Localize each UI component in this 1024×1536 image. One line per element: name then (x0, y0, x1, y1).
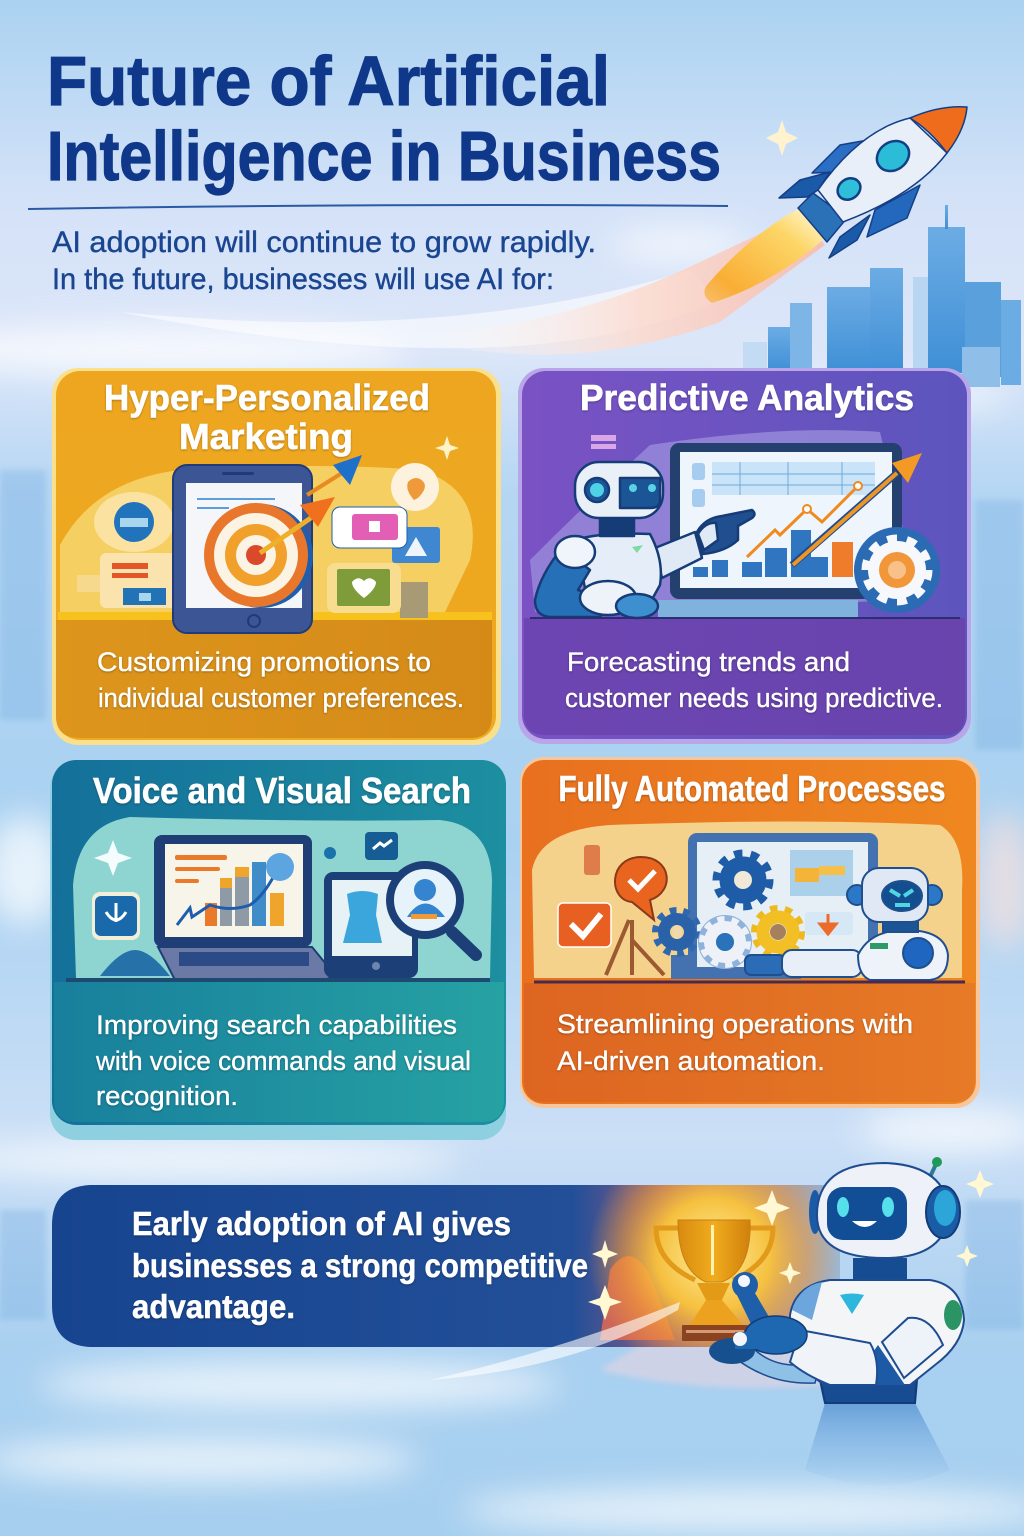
body text: Customizing promotions to (97, 647, 431, 677)
panel: hyper-personalized marketing (52, 368, 501, 745)
screen (671, 833, 878, 979)
front hand (709, 1316, 807, 1364)
banner text (132, 1205, 588, 1325)
heading (104, 377, 430, 457)
robot holding trophy (709, 1157, 964, 1485)
panel: predictive analytics (518, 368, 971, 744)
body text: customer needs using predictive. (565, 683, 943, 713)
upper arm (882, 1318, 943, 1378)
subtitle (52, 226, 596, 296)
near arm (535, 548, 610, 617)
body text: AI-driven automation. (557, 1046, 825, 1076)
callout banner (52, 1185, 840, 1390)
body text (95, 1010, 471, 1111)
torso (790, 1280, 964, 1385)
subtitle: AI adoption will continue to grow rapidly. (52, 226, 596, 259)
head (809, 1190, 821, 1234)
body text: Improving search capabilities (96, 1010, 457, 1040)
body text (97, 647, 464, 713)
title: Intelligence in Business (47, 117, 721, 195)
arrow swoosh to trophy (430, 1302, 680, 1380)
heading: Voice and Visual Search (93, 770, 471, 811)
chart screen (658, 443, 922, 617)
icon: gear (854, 527, 940, 613)
body text (565, 647, 943, 713)
title: Future of Artificial (47, 42, 610, 120)
icon: rocket (779, 107, 967, 258)
body text: recognition. (96, 1081, 238, 1111)
city skyline top right (743, 205, 1021, 387)
icon: floating cards (327, 463, 440, 618)
icon: checklist (558, 845, 667, 975)
icon: gears (656, 854, 801, 969)
small legend (591, 435, 616, 449)
body text: Forecasting trends and (567, 647, 850, 677)
heading: Marketing (179, 416, 353, 457)
hill (100, 950, 170, 976)
panel: voice and visual search (50, 760, 506, 1140)
body text: individual customer preferences. (98, 683, 464, 713)
icon: chart tile (365, 832, 398, 860)
icon: laptop chart (154, 835, 335, 980)
robot worker (745, 868, 948, 980)
rocket trail (120, 209, 825, 355)
robot reflection (805, 1403, 950, 1485)
illustration backdrop (60, 466, 473, 612)
subtitle: In the future, businesses will use AI for: (52, 263, 554, 296)
torso (575, 534, 661, 612)
rear hand (732, 1272, 758, 1298)
title (47, 42, 721, 195)
banner text: Early adoption of AI gives (132, 1205, 511, 1242)
banner text: advantage. (132, 1288, 295, 1325)
sparkle (435, 436, 459, 460)
heading: Fully Automated Processes (558, 768, 946, 809)
icon: tablet with target (173, 455, 362, 633)
title divider (28, 205, 728, 209)
heading: Hyper-Personalized (104, 377, 430, 418)
panel: fully automated processes (520, 757, 980, 1108)
banner text: businesses a strong competitive (132, 1247, 588, 1284)
robot rear arm (735, 1288, 820, 1383)
forearm (790, 1330, 877, 1385)
sparkles (588, 1170, 994, 1320)
icon: tablet with dress (324, 872, 418, 978)
icon: sparkle near rocket (766, 120, 798, 156)
body text (557, 1009, 913, 1076)
icon: magnifier (390, 865, 476, 955)
icon: mic tile (92, 892, 140, 940)
body text: with voice commands and visual (95, 1046, 471, 1076)
icon: sparkle (94, 840, 132, 876)
arm pointing (655, 532, 702, 578)
icon: chat bubbles (77, 492, 176, 608)
robot analyst (535, 462, 754, 618)
body text: Streamlining operations with (557, 1009, 913, 1039)
heading: Predictive Analytics (580, 377, 914, 418)
icon: trophy (656, 1220, 773, 1341)
head (575, 462, 663, 518)
